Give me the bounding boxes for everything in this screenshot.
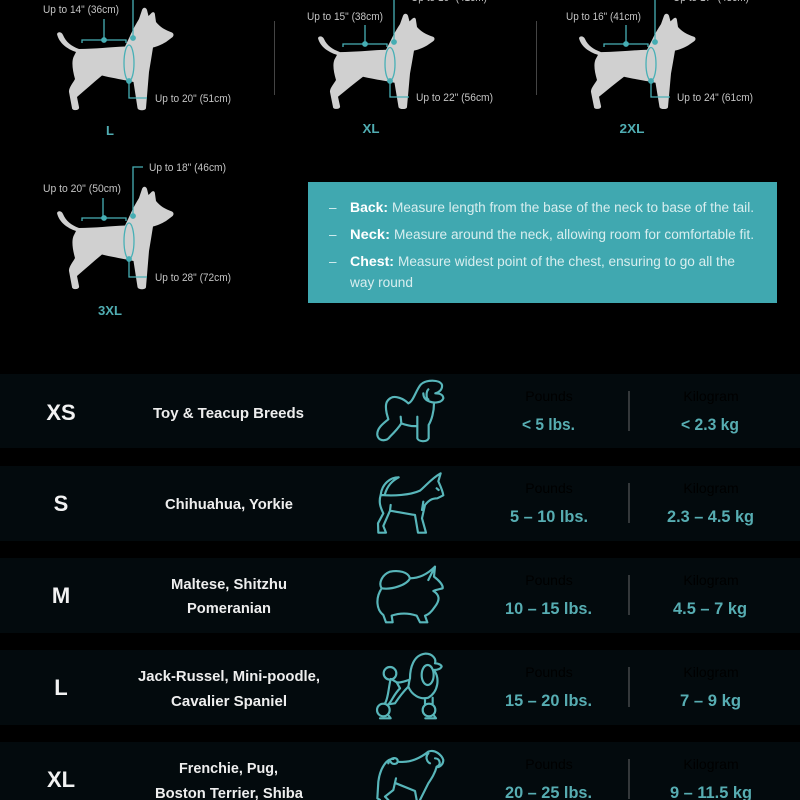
panel: L dog measurements <box>43 0 231 138</box>
Chest instruction <box>329 253 735 290</box>
3XL size name: 3XL <box>98 303 122 318</box>
XS breeds: Toy & Teacup Breeds <box>153 405 304 422</box>
row: M <box>0 558 800 633</box>
XS pounds column: Pounds <box>525 388 573 404</box>
S pounds column: Pounds <box>525 480 573 496</box>
XL chest label: Up to 22" (56cm) <box>416 92 493 104</box>
L row breeds: Cavalier Spaniel <box>171 693 287 710</box>
Back instruction: Measure length from the base of the neck to base of the tail. <box>392 200 754 215</box>
XL row size name: XL <box>47 767 75 792</box>
L row breeds <box>138 668 320 710</box>
icon: S chihuahua outline <box>378 473 443 533</box>
L row kilogram column <box>680 664 741 710</box>
XL row pounds column: Pounds <box>525 756 573 772</box>
L chest label: Up to 20" (51cm) <box>155 93 231 105</box>
M pounds column: Pounds <box>525 572 573 588</box>
XL row kilogram column: Kilogram <box>683 756 739 772</box>
L row breeds: Jack-Russel, Mini-poodle, <box>138 668 320 685</box>
icon: 2XL dog silhouette <box>579 14 696 109</box>
XS kilogram column <box>681 388 739 434</box>
Neck instruction: – <box>329 227 337 242</box>
L row kilogram column: 7 – 9 kg <box>680 691 741 710</box>
icon: XL dog silhouette <box>318 14 434 109</box>
M breeds: Maltese, Shitzhu <box>171 576 287 593</box>
icon: XS bichon outline <box>377 381 443 441</box>
S kilogram column: Kilogram <box>683 480 739 496</box>
S pounds column <box>510 480 588 526</box>
2XL back label: Up to 16" (41cm) <box>566 11 641 23</box>
L back label: Up to 14" (36cm) <box>43 4 119 16</box>
XL back label: Up to 15" (38cm) <box>307 11 383 23</box>
XS size name: XS <box>46 400 76 425</box>
M kilogram column: 4.5 – 7 kg <box>673 599 747 618</box>
2XL chest label: Up to 24" (61cm) <box>677 92 753 104</box>
XS pounds column: < 5 lbs. <box>522 415 575 434</box>
S size name: S <box>54 491 68 516</box>
S kilogram column <box>667 480 754 526</box>
L row size name: L <box>54 675 68 700</box>
M kilogram column: Kilogram <box>683 572 739 588</box>
panel: XL dog measurements <box>307 0 493 136</box>
panel: 2XL dog measurements <box>566 0 753 136</box>
L row kilogram column: Kilogram <box>683 664 739 680</box>
Chest instruction: way round <box>349 275 413 290</box>
L measurement markers <box>82 0 147 98</box>
L size name: L <box>106 123 114 138</box>
3XL measurement markers <box>82 167 147 277</box>
M kilogram column <box>673 572 747 618</box>
S breeds: Chihuahua, Yorkie <box>165 496 293 513</box>
icon: L dog silhouette <box>57 8 174 110</box>
Neck instruction: Measure around the neck, allowing room for comfortable fit. <box>394 227 754 242</box>
M pounds column: 10 – 15 lbs. <box>505 599 592 618</box>
row: XL <box>0 742 800 800</box>
M breeds: Pomeranian <box>187 600 271 617</box>
M size name: M <box>52 583 70 608</box>
icon: XL pug outline <box>377 751 443 800</box>
2XL measurement markers <box>604 0 670 97</box>
XL row breeds: Frenchie, Pug, <box>179 760 278 777</box>
L row pounds column: 15 – 20 lbs. <box>505 691 592 710</box>
XS kilogram column: Kilogram <box>683 388 739 404</box>
Back instruction: Back: <box>350 199 388 215</box>
M breeds <box>171 576 287 617</box>
Neck instruction: Neck: <box>350 226 390 242</box>
panel: 3XL dog measurements <box>43 162 231 318</box>
L row pounds column <box>505 664 592 710</box>
Chest instruction: – <box>329 254 337 269</box>
panel: how to measure callout <box>308 182 777 303</box>
2XL size name: 2XL <box>620 121 645 136</box>
3XL chest label: Up to 28" (72cm) <box>155 272 231 284</box>
3XL back label: Up to 20" (50cm) <box>43 183 121 195</box>
row: XS <box>0 374 800 448</box>
M pounds column <box>505 572 592 618</box>
XL row kilogram column <box>670 756 752 800</box>
S pounds column: 5 – 10 lbs. <box>510 507 588 526</box>
XL row breeds <box>155 760 304 800</box>
XL row pounds column <box>505 756 592 800</box>
XL size name: XL <box>362 121 380 136</box>
L row pounds column: Pounds <box>525 664 573 680</box>
icon: L poodle outline <box>377 654 442 718</box>
3XL neck label: Up to 18" (46cm) <box>149 162 226 174</box>
icon: M pomeranian outline <box>377 567 443 622</box>
row: S <box>0 466 800 541</box>
Chest instruction: Measure widest point of the chest, ensuring to go all the <box>398 254 735 269</box>
S kilogram column: 2.3 – 4.5 kg <box>667 507 754 526</box>
XS pounds column <box>522 388 575 434</box>
Back instruction: – <box>329 200 337 215</box>
XS kilogram column: < 2.3 kg <box>681 415 739 434</box>
XL measurement markers <box>343 0 409 97</box>
row: L <box>0 650 800 725</box>
Chest instruction: Chest: <box>350 253 394 269</box>
icon: 3XL dog silhouette <box>57 187 174 289</box>
